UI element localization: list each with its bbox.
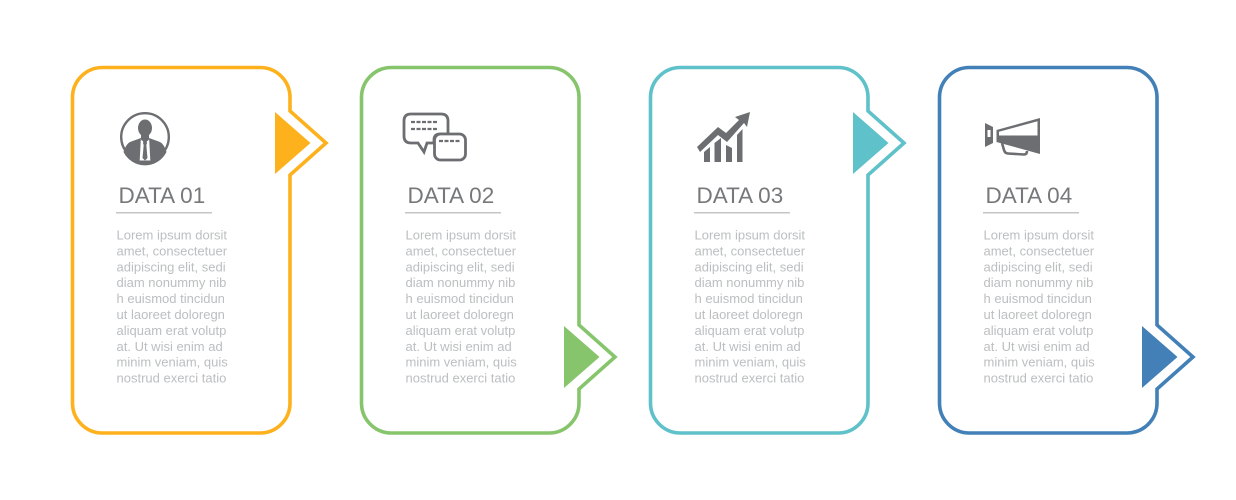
body text: diam nonummy nib xyxy=(116,275,226,290)
body text: adipiscing elit, sedi xyxy=(406,259,515,274)
body text: ut laoreet doloregn xyxy=(694,307,803,322)
panel: data 04 xyxy=(940,68,1193,433)
body text: Lorem ipsum dorsit xyxy=(406,228,516,242)
heading underline xyxy=(405,212,501,214)
body text: diam nonummy nib xyxy=(406,275,515,290)
body text: nostrud exerci tatio xyxy=(116,371,226,386)
panel: data 01 xyxy=(72,68,326,433)
body text: h euismod tincidun xyxy=(116,291,225,306)
body text: Lorem ipsum dorsit xyxy=(116,228,227,242)
body text: adipiscing elit, sedi xyxy=(984,259,1093,274)
panel: data 02 xyxy=(362,68,615,433)
panel: data 03 xyxy=(650,68,904,433)
body text: adipiscing elit, sedi xyxy=(694,259,804,274)
heading: DATA 03 xyxy=(696,183,783,208)
card outline with arrow notch xyxy=(362,68,615,433)
body text: at. Ut wisi enim ad xyxy=(694,339,801,354)
body text: amet, consectetuer xyxy=(984,243,1095,258)
body text: diam nonummy nib xyxy=(694,275,804,290)
heading: DATA 02 xyxy=(408,183,494,208)
body text: at. Ut wisi enim ad xyxy=(116,339,223,354)
body text: amet, consectetuer xyxy=(406,243,517,258)
body text: diam nonummy nib xyxy=(984,275,1093,290)
icon: megaphone xyxy=(985,118,1040,154)
body text: Lorem ipsum dorsit xyxy=(984,228,1094,242)
arrow triangle xyxy=(853,112,888,174)
body text: ut laoreet doloregn xyxy=(116,307,225,322)
body text: at. Ut wisi enim ad xyxy=(406,339,512,354)
body text: adipiscing elit, sedi xyxy=(116,259,226,274)
heading underline xyxy=(116,212,212,214)
arrow triangle xyxy=(275,112,310,174)
body text: aliquam erat volutp xyxy=(116,323,226,338)
body text: amet, consectetuer xyxy=(694,243,806,258)
arrow triangle xyxy=(564,326,600,388)
heading: DATA 01 xyxy=(118,183,205,208)
card outline with arrow notch xyxy=(72,68,326,433)
body text: minim veniam, quis xyxy=(116,355,228,370)
icon: growth chart xyxy=(697,112,750,162)
heading underline xyxy=(694,212,790,214)
body text: minim veniam, quis xyxy=(694,355,806,370)
body text: h euismod tincidun xyxy=(984,291,1092,306)
body text: aliquam erat volutp xyxy=(984,323,1093,338)
body text: ut laoreet doloregn xyxy=(984,307,1092,322)
card outline with arrow notch xyxy=(940,68,1193,433)
heading: DATA 04 xyxy=(986,183,1072,208)
body text: nostrud exerci tatio xyxy=(984,371,1093,386)
body text: h euismod tincidun xyxy=(406,291,514,306)
body text: minim veniam, quis xyxy=(406,355,517,370)
body text: nostrud exerci tatio xyxy=(406,371,515,386)
body text: ut laoreet doloregn xyxy=(406,307,514,322)
body text: amet, consectetuer xyxy=(116,243,228,258)
card outline with arrow notch xyxy=(650,68,904,433)
body text: nostrud exerci tatio xyxy=(694,371,804,386)
icon: businessman xyxy=(121,113,169,165)
icon: speech bubbles xyxy=(404,114,466,160)
heading underline xyxy=(983,212,1079,214)
body text: aliquam erat volutp xyxy=(694,323,804,338)
body text: h euismod tincidun xyxy=(694,291,803,306)
body text: Lorem ipsum dorsit xyxy=(694,228,805,242)
body text: minim veniam, quis xyxy=(984,355,1095,370)
body text: at. Ut wisi enim ad xyxy=(984,339,1090,354)
body text: aliquam erat volutp xyxy=(406,323,515,338)
arrow triangle xyxy=(1142,326,1178,388)
